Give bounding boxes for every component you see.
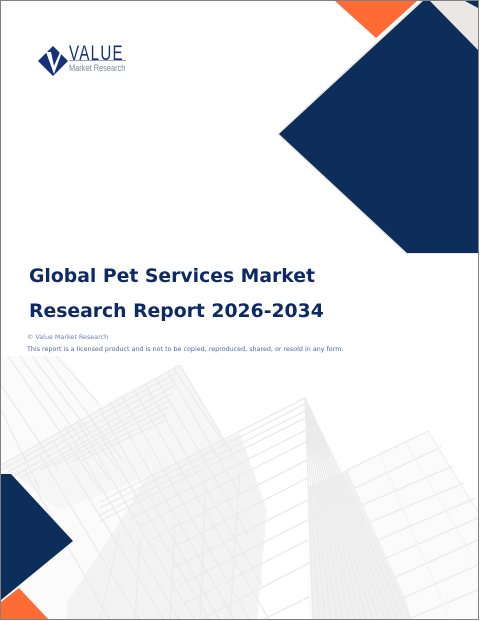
light grey band and shadow bbox=[277, 1, 478, 254]
logo wordmark: Market Research bbox=[69, 63, 125, 74]
logo underline bbox=[69, 60, 126, 61]
title: Research Report 2026-2034 bbox=[29, 301, 324, 322]
logo wordmark bbox=[69, 42, 125, 74]
orange shape bottom left bbox=[1, 588, 49, 620]
licence notice: This report is a licensed product and is not to be copied, reproduced, shared, or resold in any form. bbox=[27, 345, 343, 353]
navy diamond bbox=[279, 1, 478, 253]
logo wordmark: VALUE bbox=[69, 42, 124, 65]
copyright line: © Value Market Research bbox=[27, 333, 108, 341]
title bbox=[29, 266, 324, 322]
navy shape bottom left bbox=[1, 474, 73, 600]
orange triangle top bbox=[335, 1, 417, 38]
title: Global Pet Services Market bbox=[29, 266, 315, 287]
logo diamond icon bbox=[38, 46, 68, 76]
navy corner bbox=[465, 1, 478, 8]
